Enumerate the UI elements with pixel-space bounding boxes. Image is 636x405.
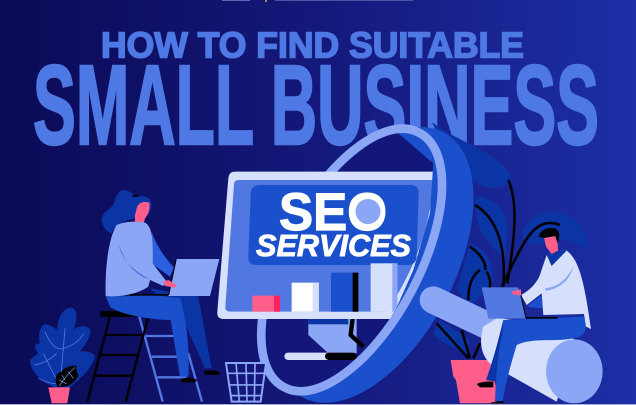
screen label [248,185,419,265]
laptop edge [521,295,526,318]
upper middle leaf [475,197,507,260]
base shadow [325,353,357,360]
blue bar [331,273,358,312]
near leg [106,295,189,377]
laptop edge [169,260,176,295]
far shoe [477,382,493,387]
monitor [217,172,437,360]
stems [437,180,560,358]
leaf veins [34,328,84,384]
laptop [168,259,219,296]
monitor cable [351,318,363,347]
lens body [273,127,473,403]
lens back: ring and body [261,127,473,403]
laptop [482,287,526,319]
far leg [150,288,212,368]
hair [539,228,559,243]
sleeve fold [118,243,150,279]
title line: how to find suitable: HOW TO FIND SUITABLE [101,24,524,66]
near leg [495,317,586,402]
man on cylinder [477,228,603,403]
cylinder [481,318,577,402]
face [544,236,558,254]
far shoe [204,371,220,375]
monitor frame [217,172,437,319]
sprig veins [59,367,75,386]
left pot [48,387,70,403]
title [33,24,599,168]
monitor base [284,353,356,360]
right plant leaves [432,122,588,353]
lap line [526,317,558,319]
stool top [100,311,137,317]
pot [451,360,498,403]
ponytail [102,190,135,233]
far arm [152,232,174,277]
woman on ladder [30,190,220,403]
monitor stand [308,318,357,353]
head hair [132,196,151,217]
near shoe [181,378,197,382]
seo: SEO [279,183,387,242]
sleeve fold [545,267,573,291]
top leaf [432,122,511,188]
sweater [106,222,167,296]
pink bar [252,296,280,312]
handle [433,300,500,332]
lens front [304,124,474,400]
low leaf [433,320,470,353]
leaf above man [522,212,588,251]
white bar [292,283,319,312]
tall bar [371,263,397,312]
top logo remnant [222,0,413,2]
lap line [130,294,169,296]
stand shadow [308,318,348,324]
left plant [30,308,95,388]
blue ladder [139,317,202,402]
small black sprig [56,366,78,387]
hair tie [133,195,137,197]
lens glass [261,129,442,391]
collar [547,251,567,266]
far leg [486,320,513,382]
hand [163,280,177,288]
shirt [521,251,591,329]
lens dot in O [356,199,380,224]
near shoe [489,401,503,403]
bottom edge line [0,404,636,405]
face [135,202,150,225]
right plant and stems [433,180,560,403]
lower middle leaf [457,243,492,307]
services: SERVICES [256,228,411,263]
trash can [226,363,266,402]
hand [511,289,521,295]
cylinder end [546,339,603,403]
seo label text [256,183,411,263]
monitor screen [225,180,433,312]
black ladder [87,317,148,402]
arm shadow [527,295,543,308]
leaves [30,308,95,388]
